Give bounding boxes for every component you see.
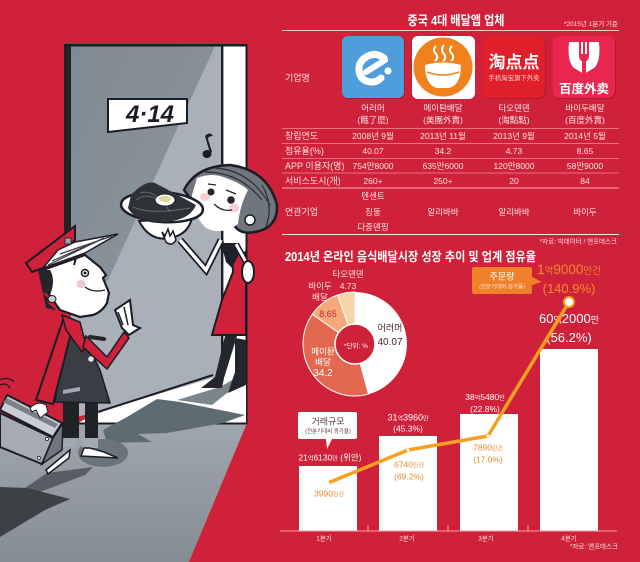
row: market share: 40.07 [362,146,384,156]
donut label: Taodiandian: 4.73 [340,281,357,291]
woman face [192,175,248,231]
x axis labels: 3분기 [478,534,494,542]
row: market share [285,145,594,156]
bar value labels: (45.3%) [393,424,423,434]
callout: transaction volume legend: 거래규모 [311,416,345,426]
logo: Taodiandian: 手机淘宝旗下外卖 [488,73,540,82]
row: service cities: 서비스도시(개) [285,176,341,186]
door and frame [64,44,248,424]
woman holding bowl [120,165,277,393]
briefcase [0,378,63,464]
company names: (餓了麽) [357,115,389,125]
row: related companies: 알리바바 [498,207,530,217]
order value labels [314,262,601,498]
order value labels: 7890만건 [473,442,503,452]
woman arm [180,240,221,270]
bar value labels: 31억3960만 [387,412,429,422]
row: related companies [285,191,597,232]
row: service cities [285,176,590,186]
order value labels: 3990만건 [314,488,344,498]
row: service cities: 20 [509,176,519,186]
bowl of noodles [139,218,192,239]
floor shadows [0,372,246,537]
man shoes [46,450,70,474]
donut label: Baidu: 8.65 [319,309,337,319]
door number plate [108,99,187,132]
bar value labels: 38억5480만 [465,392,505,402]
woman hand [162,229,176,244]
callout: transaction volume legend: (전분기대비 증가율) [305,427,351,435]
donut label: Baidu: 배달 [312,292,328,302]
row: related companies: 텐센트 [361,191,385,201]
row: founding date: 2013년 11월 [420,131,466,141]
bar value labels: 60억2000만 [539,311,599,326]
donut label: Eleme [377,323,403,348]
donut label: Meituan: 메이퇀 [311,346,335,356]
donut chart: market share [303,269,407,396]
illustration: delivery scene [0,44,277,562]
callout: transaction volume legend [298,412,357,449]
x axis labels [316,534,577,542]
row: founding date: 2008년 9월 [352,131,394,141]
row: founding date: 2013년 9월 [493,131,535,141]
donut label: Taodiandian: 타오뎬뎬 [332,269,364,279]
logo: Baidu delivery: 百度外卖 [559,81,609,96]
row: related companies: 징둥 [365,207,381,217]
row: app users: 120만8000 [494,161,535,171]
row: market share: 34.2 [435,146,452,156]
bar value labels: (56.2%) [546,330,592,345]
company names [357,103,605,125]
bar value labels: 21억6130만 (위안) [298,452,362,462]
donut label: Eleme: 어러머 [378,323,402,333]
row: service cities: 84 [580,176,590,186]
icon: music note [202,134,213,158]
woman legs [201,336,246,393]
row: founding date [285,131,606,141]
callout: order volume legend [472,267,542,294]
bar value labels [298,311,599,462]
woman hair [184,165,277,233]
row: related companies: 연관기업 [285,207,318,217]
x axis labels: 4분기 [561,534,577,542]
row: app users: APP 이용자(명) [285,161,344,171]
note: reference date: *2015년 1분기 기준 [564,19,618,28]
logo: Baidu delivery [553,36,616,99]
man hand [115,300,140,335]
man coat [55,328,110,403]
row label: company name: 기업명 [285,73,310,83]
logo: Taodiandian [483,36,546,99]
row: founding date: 2014년 5월 [564,131,606,141]
donut label: Taodiandian [332,269,364,291]
row: app users: 754만8000 [353,161,394,171]
company names: 메이퇀배달 [423,103,463,113]
heading: market growth: 2014년 온라인 음식배달시장 성장 추이 및 업계 점유율 [285,250,536,264]
man arm [83,332,129,369]
row: app users [285,161,603,171]
donut label: Eleme: 40.07 [377,337,403,348]
door number plate: 4·14 [125,101,174,128]
row: app users: 58만9000 [567,161,603,171]
line chart: order volume [314,262,601,498]
donut label: Baidu: 바이두 [308,281,332,291]
row: market share: 4.73 [506,146,523,156]
row: related companies: 바이두 [573,207,597,217]
man hat [26,226,75,272]
logo: Taodiandian: 淘点点 [488,53,540,72]
logo: Meituan [412,36,475,99]
donut label: Baidu [308,281,337,319]
row: app users: 635만6000 [423,161,464,171]
company names: 타오뎬뎬 [498,103,530,113]
donut center unit: *단위: % [344,341,368,350]
row: service cities: 250+ [433,176,453,186]
table: company comparison [282,36,619,232]
row: service cities: 260+ [363,176,383,186]
order value labels: 1억9000만건 [537,262,601,277]
company names: (百度外賣) [565,115,605,125]
donut label: Meituan: 배달 [315,357,331,367]
donut label: Meituan [311,346,335,379]
row: founding date: 창립연도 [285,131,318,141]
order value labels: 6740만건 [394,460,424,470]
order value labels: (140.9%) [543,281,595,296]
order value labels: (69.2%) [394,472,424,482]
x axis labels: 2분기 [399,534,415,542]
man head [43,255,109,317]
callout: order volume legend: (전분기대비 증가율) [479,282,525,290]
woman dress [212,252,246,335]
floor [0,423,247,562]
company names: 어러머 [361,103,385,113]
company names: (淘點點) [498,115,530,125]
row: market share: 8.65 [577,146,594,156]
x axis labels: 1분기 [316,534,332,542]
row: market share: 점유율(%) [285,145,324,156]
donut label: Meituan: 34.2 [313,368,333,379]
logo: Eleme [342,36,405,99]
row: related companies: 다중뎬핑 [357,222,389,232]
heading: delivery apps table: 중국 4대 배달앱 업체 [408,13,504,28]
callout: order volume legend: 주문량 [490,270,514,282]
source note: chart: *자료: 엔포데스크 [570,542,618,550]
row: related companies: 알리바바 [427,207,459,217]
man legs [63,402,79,438]
bar value labels: (22.8%) [470,404,500,414]
order value labels: (17.0%) [473,454,503,464]
source note: table: *자료: 빅데이터 / 엔포데스크 [540,236,617,246]
company names: 바이두배달 [565,103,605,113]
company names: (美團外賣) [423,115,463,125]
bar chart: quarterly transaction volume [280,311,617,542]
delivery man [26,226,140,474]
